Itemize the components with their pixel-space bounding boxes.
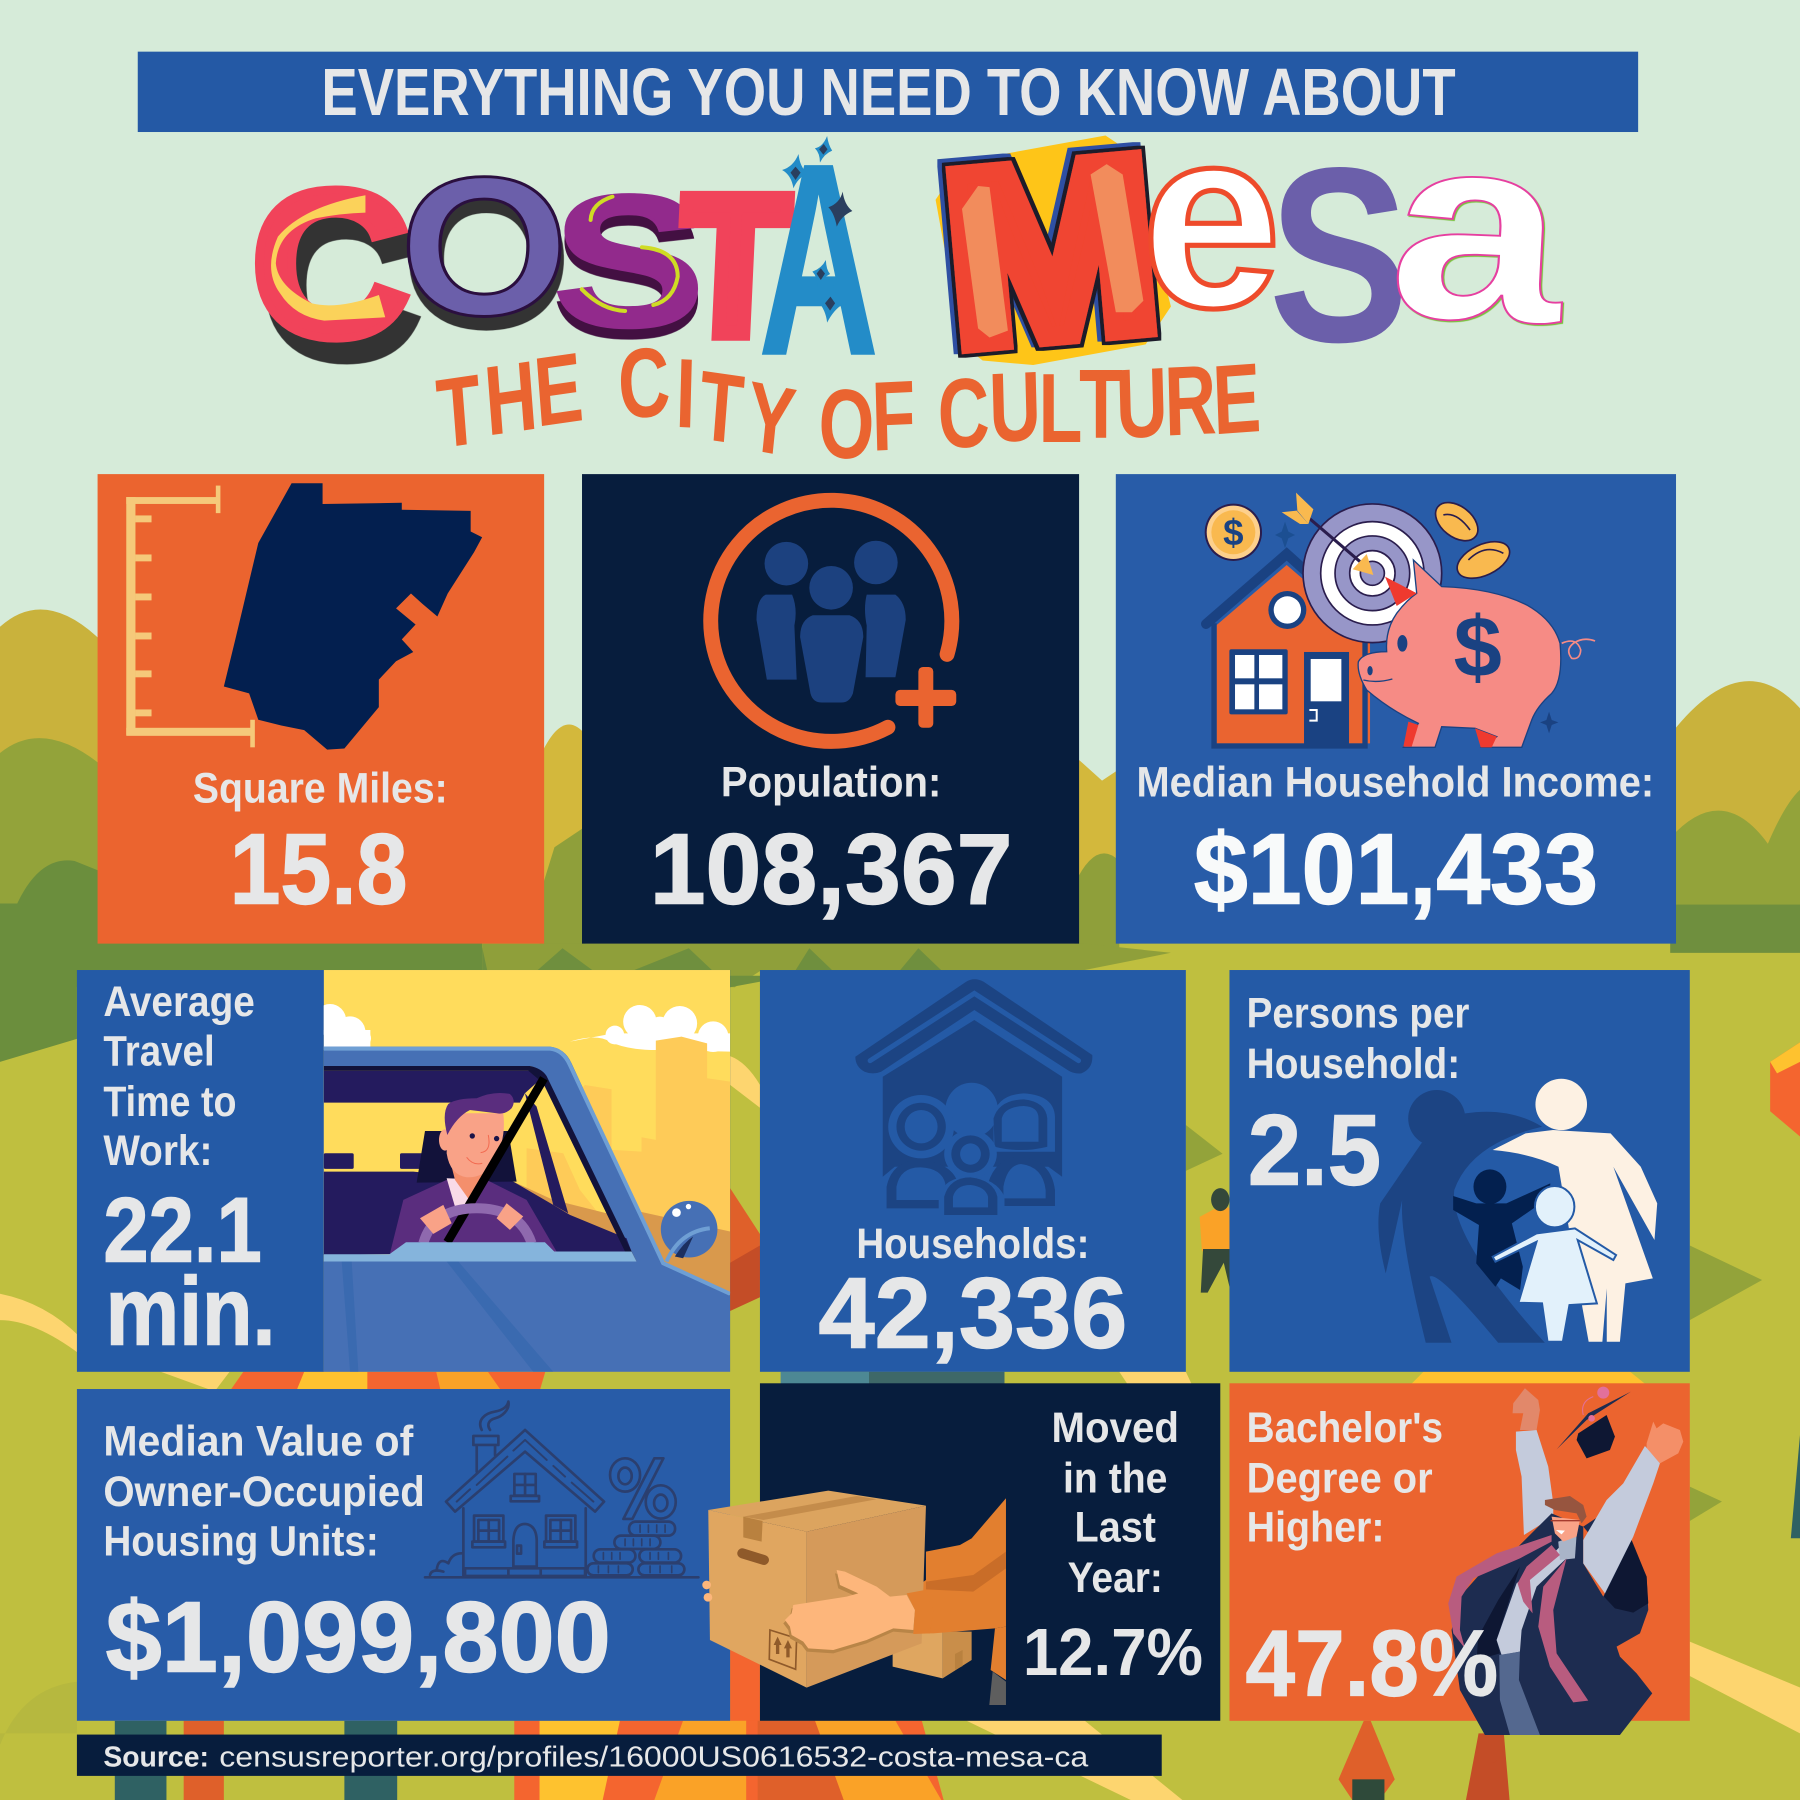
icon: house and coins	[425, 1402, 698, 1577]
letter a: a	[1384, 76, 1573, 380]
label	[1247, 1404, 1443, 1551]
label: Time to	[103, 1078, 236, 1125]
logotype: Mesa	[935, 74, 1573, 397]
decoration: C inner band	[271, 195, 385, 321]
sparkles	[782, 136, 852, 323]
label: Median Household Income:	[1136, 759, 1654, 806]
value: 15.8	[230, 814, 408, 925]
panel: population	[582, 474, 1079, 944]
label: Median Value of	[103, 1418, 414, 1465]
icon: house, target and piggy bank	[1205, 493, 1595, 747]
icon: ruler	[126, 486, 255, 747]
label: Owner-Occupied	[103, 1468, 425, 1515]
value: 22.1	[103, 1180, 262, 1282]
label: Bachelor's	[1247, 1404, 1443, 1451]
letter S: S	[1268, 116, 1409, 394]
panel: median home value	[77, 1389, 730, 1721]
letter e: e	[1141, 74, 1282, 362]
value: 108,367	[650, 814, 1013, 925]
header banner	[138, 52, 1638, 132]
label: Housing Units:	[103, 1517, 379, 1564]
subtitle: THE CITY OF CULTURE	[433, 326, 1263, 482]
label: in the	[1063, 1454, 1167, 1501]
label	[1052, 1404, 1179, 1601]
logotype: Costa	[250, 106, 880, 414]
label: Household:	[1247, 1040, 1460, 1087]
icon: people with plus	[711, 500, 956, 741]
value: 47.8%	[1246, 1611, 1498, 1716]
icon: house, target and piggy bank: $	[1223, 512, 1244, 553]
label: Degree or	[1247, 1454, 1433, 1501]
icon: family silhouettes	[1378, 1079, 1657, 1343]
banner title: EVERYTHING YOU NEED TO KNOW ABOUT	[321, 56, 1456, 130]
letter S: S	[552, 157, 705, 366]
panel: travel time	[77, 970, 730, 1372]
value	[103, 1180, 276, 1365]
label	[103, 978, 255, 1174]
panel: square miles	[98, 474, 544, 944]
yellow badge	[936, 135, 1171, 365]
label: Square Miles:	[193, 764, 448, 811]
value: $1,099,800	[106, 1582, 611, 1693]
value: 42,336	[818, 1259, 1127, 1370]
panel: households	[760, 970, 1186, 1372]
label: Persons per	[1247, 989, 1469, 1036]
letter O: O	[399, 137, 569, 357]
source text: censusreporter.org/profiles/16000US0616532-costa-mesa-ca	[219, 1742, 1088, 1774]
background people	[115, 1188, 1800, 1800]
icon: city map	[224, 483, 482, 750]
decoration: M inner panels	[962, 164, 1143, 338]
illustration: driver in car	[324, 970, 730, 1372]
panel: moved in the last year	[702, 1383, 1220, 1721]
icon: family in house	[855, 979, 1092, 1215]
letter T: T	[676, 157, 792, 375]
label: Work:	[103, 1127, 212, 1174]
panel: bachelor's degree	[1229, 1383, 1690, 1735]
label: Households:	[856, 1220, 1089, 1267]
letter M: M	[935, 105, 1168, 397]
label	[103, 1418, 425, 1564]
label	[1247, 989, 1469, 1087]
letter C: C	[250, 146, 411, 381]
icon: house, target and piggy bank: $	[1454, 600, 1502, 696]
source text: Source:	[103, 1742, 209, 1774]
label: Population:	[721, 759, 941, 806]
value: 12.7%	[1023, 1616, 1203, 1690]
illustration: hand holding box	[702, 1491, 1006, 1705]
label: Average	[103, 978, 255, 1025]
value: $101,433	[1194, 814, 1598, 925]
label: Moved	[1052, 1404, 1179, 1451]
label: Last	[1074, 1504, 1156, 1551]
source bar	[77, 1735, 1162, 1776]
panel: persons per household	[1229, 970, 1690, 1372]
label: Higher:	[1247, 1504, 1384, 1551]
value: 2.5	[1248, 1096, 1381, 1207]
label: Year:	[1068, 1554, 1163, 1601]
panel: median household income	[1116, 474, 1676, 944]
label: Travel	[103, 1027, 215, 1074]
illustration: graduate	[1448, 1387, 1683, 1735]
value: min.	[106, 1258, 276, 1365]
decoration: S highlights	[582, 197, 678, 311]
letter A: A	[758, 106, 880, 414]
